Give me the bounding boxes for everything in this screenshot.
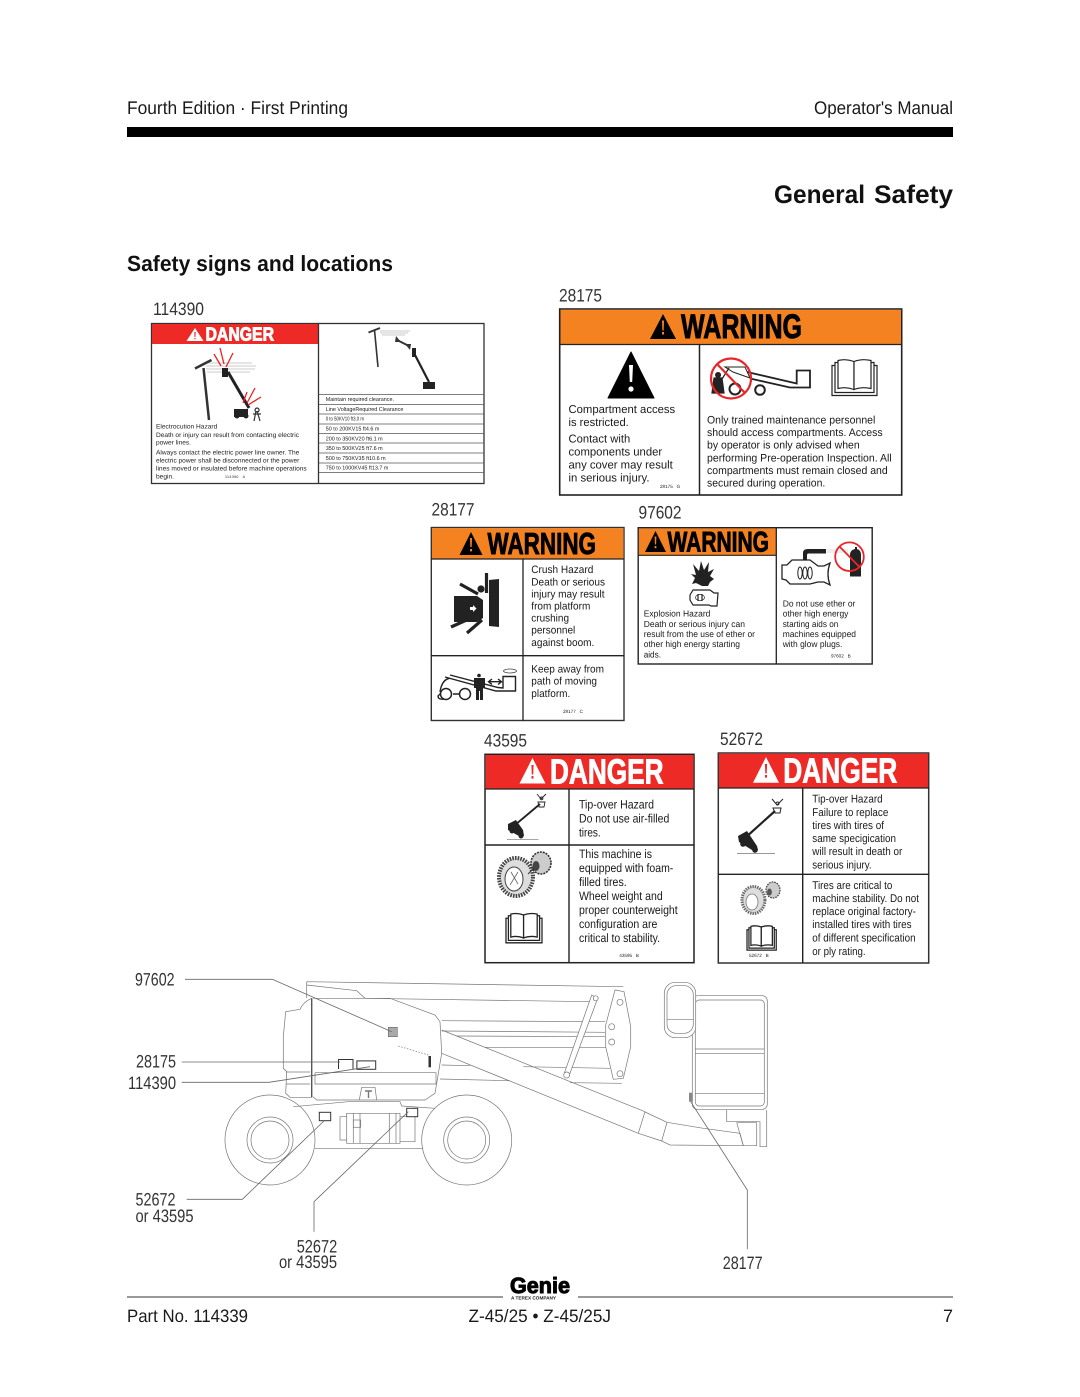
danger banner: DANGER xyxy=(783,752,897,791)
text: electrocution hazard: lines moved or insulated before machine operations xyxy=(156,465,307,472)
text: compartment access xyxy=(568,404,681,489)
text: failure to replace tires xyxy=(811,794,903,872)
running header left: Fourth Edition · First Printing xyxy=(127,97,348,118)
logo: Genie: Genie xyxy=(510,1273,570,1298)
callout: 52672 or 43595 left location: 52672 xyxy=(136,1190,176,1210)
text: electrocution hazard: Always contact the electric power line owner. The xyxy=(156,450,300,457)
platform xyxy=(664,982,767,1147)
text: foam-filled tires: filled tires. xyxy=(579,875,627,889)
warning banner xyxy=(431,527,624,561)
icon: manual book xyxy=(506,913,542,943)
text: compartment access: is restricted. xyxy=(568,417,629,429)
text: failure to replace tires: Tip-over Hazard xyxy=(812,794,883,806)
text: failure to replace tires: serious injury. xyxy=(812,860,872,872)
callout: 52672 or 43595 right location: 52672 xyxy=(297,1237,337,1257)
text: failure to replace tires: same specigication xyxy=(812,833,896,845)
panel: sign 114390 danger electrocution xyxy=(152,324,484,484)
clearance table: 750 to 1000KV45 ft13.7 m xyxy=(326,465,389,472)
text: do not use ether: starting aids on xyxy=(783,619,838,629)
text: keep away: Keep away from xyxy=(531,664,604,676)
icon: electrocution at power line xyxy=(195,348,261,421)
text: electrocution hazard xyxy=(156,424,307,480)
icon: tip-over boom xyxy=(507,794,546,840)
warning banner: WARNING xyxy=(668,526,769,558)
icon: crush hazard xyxy=(451,573,499,633)
text: explosion hazard: result from the use of ether or xyxy=(644,629,755,639)
clearance table xyxy=(319,394,484,472)
footer part number: Part No. 114339 xyxy=(127,1306,248,1326)
text: crush hazard: personnel xyxy=(531,624,575,636)
text: failure to replace tires: will result in death or xyxy=(811,846,903,858)
icon: tire and wheel xyxy=(499,852,551,896)
text: electrocution hazard: 114390 A xyxy=(225,475,246,479)
text: failure to replace tires: tires with tires of xyxy=(812,820,885,832)
footer page number: 7 xyxy=(943,1306,953,1326)
section heading: Safety signs and locations xyxy=(127,251,393,276)
text: do not use air-filled tires: Tip-over Hazard xyxy=(579,798,654,812)
panel: sign 28175 warning compartment xyxy=(560,308,902,495)
callout: 97602 location xyxy=(135,970,392,1032)
text: foam-filled tires: critical to stability. xyxy=(579,931,660,945)
text: explosion hazard: Death or serious injury can xyxy=(644,619,745,629)
text: explosion hazard: other high energy starting xyxy=(644,639,740,649)
warning banner: WARNING xyxy=(488,527,596,561)
text: tires critical to stability: of different specification xyxy=(812,932,916,944)
text: foam-filled tires xyxy=(579,847,678,958)
callout: 28177 location xyxy=(691,1102,763,1273)
warning banner xyxy=(560,308,902,346)
text: compartment access: Contact with xyxy=(568,434,630,446)
text: crush hazard: Death or serious xyxy=(531,576,605,588)
text: explosion hazard: aids. xyxy=(644,649,661,659)
panel: sign 28177 warning crush xyxy=(431,527,624,721)
text: foam-filled tires: 43595 B xyxy=(619,953,639,958)
icon: keep away from moving platform xyxy=(438,669,516,700)
clearance table: 350 to 500KV25 ft7.6 m xyxy=(326,445,383,452)
danger banner: DANGER xyxy=(206,324,274,346)
text: tires critical to stability xyxy=(749,880,920,958)
footer rule left xyxy=(127,1296,503,1298)
label 97602: 97602 xyxy=(638,503,682,523)
icon: explosion over engine xyxy=(690,561,718,606)
danger banner: DANGER xyxy=(550,752,664,792)
label 114390: 114390 xyxy=(153,299,204,319)
text: tires critical to stability: or ply rating. xyxy=(812,946,866,958)
rear wheel xyxy=(225,1095,315,1185)
text: electrocution hazard: begin. xyxy=(156,473,174,480)
text: compartment access: in serious injury. xyxy=(568,472,650,484)
clearance table: 500 to 750KV35 ft10.6 m xyxy=(326,455,386,462)
clearance table: 0 to 50KV10 ft3.0 m xyxy=(326,416,364,423)
text: only trained personnel: should access compartments. Access xyxy=(707,427,883,439)
clearance table: 200 to 350KV20 ft6.1 m xyxy=(326,435,383,442)
text: crush hazard: Crush Hazard xyxy=(531,564,593,576)
header rule xyxy=(127,127,953,137)
page title: Safety xyxy=(874,181,954,209)
icon: warning triangle xyxy=(608,352,654,398)
callout: 52672 or 43595 right location: or 43595 xyxy=(279,1252,337,1272)
callout: 52672 or 43595 right location xyxy=(279,1112,408,1272)
text: keep away: 28177 C xyxy=(563,709,584,714)
text: crush hazard: from platform xyxy=(531,600,590,612)
warning banner xyxy=(638,526,776,558)
callout: 114390 location: 114390 xyxy=(128,1073,176,1093)
callout: 28175 location: 28175 xyxy=(136,1052,176,1072)
text: foam-filled tires: Wheel weight and xyxy=(579,889,663,903)
label 28177: 28177 xyxy=(432,499,474,519)
text: tires critical to stability: 52672 B xyxy=(749,953,769,958)
text: only trained personnel: compartments must remain closed and xyxy=(707,465,888,477)
running header right: Operator's Manual xyxy=(814,97,953,118)
text: keep away: path of moving xyxy=(531,676,597,688)
text: do not use ether: 97602 B xyxy=(831,653,851,658)
icon: no ether xyxy=(782,542,864,585)
warning banner: WARNING xyxy=(681,308,802,346)
icon: tire and wheel xyxy=(742,882,780,914)
text: compartment access: 28175 G xyxy=(660,484,681,489)
machine diagram: boom lift line drawing xyxy=(225,982,767,1185)
footer rule right xyxy=(578,1296,953,1298)
text: only trained personnel: secured during operation. xyxy=(707,478,825,490)
text: electrocution hazard: Death or injury can result from contacting electric xyxy=(156,432,300,439)
text: tires critical to stability: machine stability. Do not xyxy=(812,893,920,905)
callout: 28177 location: 28177 xyxy=(723,1253,763,1273)
clearance table: Line VoltageRequired Clearance xyxy=(326,406,403,413)
panel: sign 43595 danger tip-over xyxy=(485,752,694,963)
text: electrocution hazard: power lines. xyxy=(156,440,191,447)
text: do not use ether: Do not use ether or xyxy=(783,599,855,609)
text: explosion hazard: Explosion Hazard xyxy=(644,609,710,619)
callout: 97602 location: 97602 xyxy=(135,970,174,990)
text: only trained personnel: by operator is only advised when xyxy=(707,440,860,452)
icon: tip-over boom xyxy=(737,799,783,854)
label 43595: 43595 xyxy=(484,731,527,751)
text: do not use ether: machines equipped xyxy=(783,629,856,639)
text: keep away: platform. xyxy=(531,688,570,700)
text: explosion hazard xyxy=(644,609,755,659)
text: foam-filled tires: proper counterweight xyxy=(579,903,678,917)
text: electrocution hazard: electric power shall be disconnected or the power xyxy=(156,458,300,465)
text: crush hazard: injury may result xyxy=(531,588,605,600)
text: crush hazard: crushing xyxy=(531,612,569,624)
text: foam-filled tires: equipped with foam- xyxy=(579,861,673,875)
callout: 52672 or 43595 left location: or 43595 xyxy=(136,1206,194,1226)
text: failure to replace tires: Failure to replace xyxy=(812,807,888,819)
front wheel xyxy=(422,1095,512,1185)
text: tires critical to stability: Tires are critical to xyxy=(812,880,892,892)
text: compartment access: Compartment access xyxy=(568,404,675,416)
danger banner xyxy=(485,752,694,792)
boom xyxy=(440,1021,743,1146)
text: crush hazard: against boom. xyxy=(531,637,594,649)
text: compartment access: components under xyxy=(568,446,662,458)
clearance table: 50 to 200KV15 ft4.6 m xyxy=(326,426,380,433)
clearance table: Maintain required clearance. xyxy=(326,396,394,403)
text: do not use air-filled tires xyxy=(579,798,669,840)
icon: maintain clearance xyxy=(368,328,435,389)
text: compartment access: any cover may result xyxy=(568,460,674,472)
text: do not use air-filled tires: tires. xyxy=(579,826,601,840)
label 28175: 28175 xyxy=(559,286,602,306)
text: only trained personnel xyxy=(707,414,892,490)
text: only trained personnel: performing Pre-operation Inspection. All xyxy=(707,452,892,464)
page title: General xyxy=(774,181,865,209)
text: only trained personnel: Only trained maintenance personnel xyxy=(707,414,875,426)
jib mount plate and cylinder xyxy=(564,990,631,1079)
panel: sign 97602 warning explosion xyxy=(638,526,872,664)
text: foam-filled tires: configuration are xyxy=(579,917,657,931)
text: electrocution hazard: Electrocution Hazard xyxy=(156,424,218,431)
callout: 114390 location xyxy=(128,1067,370,1093)
text: crush hazard xyxy=(531,564,605,649)
label 52672: 52672 xyxy=(720,729,763,749)
footer model: Z-45/25 • Z-45/25J xyxy=(468,1306,611,1326)
logo: Genie: A TEREX COMPANY xyxy=(511,1296,556,1300)
text: tires critical to stability: replace original factory- xyxy=(812,906,916,918)
callout: 52672 or 43595 left location xyxy=(136,1120,325,1226)
icon: manual book xyxy=(747,926,776,950)
icon: no entry machine xyxy=(711,358,810,398)
chassis and engine xyxy=(293,1102,435,1148)
turntable and engine covers xyxy=(283,982,623,1100)
text: do not use air-filled tires: Do not use air-filled xyxy=(579,812,669,826)
text: tires critical to stability: installed tires with tires xyxy=(812,919,912,931)
danger banner xyxy=(718,752,929,791)
text: do not use ether: other high energy xyxy=(783,609,849,619)
panel: sign 52672 danger tip-over xyxy=(718,752,929,963)
text: do not use ether xyxy=(782,599,856,658)
text: keep away xyxy=(531,664,604,714)
text: do not use ether: with glow plugs. xyxy=(782,639,842,649)
decal location markers xyxy=(319,1027,693,1121)
page title xyxy=(774,181,954,209)
danger banner xyxy=(152,324,318,346)
text: foam-filled tires: This machine is xyxy=(579,847,652,861)
icon: manual book xyxy=(832,360,877,396)
